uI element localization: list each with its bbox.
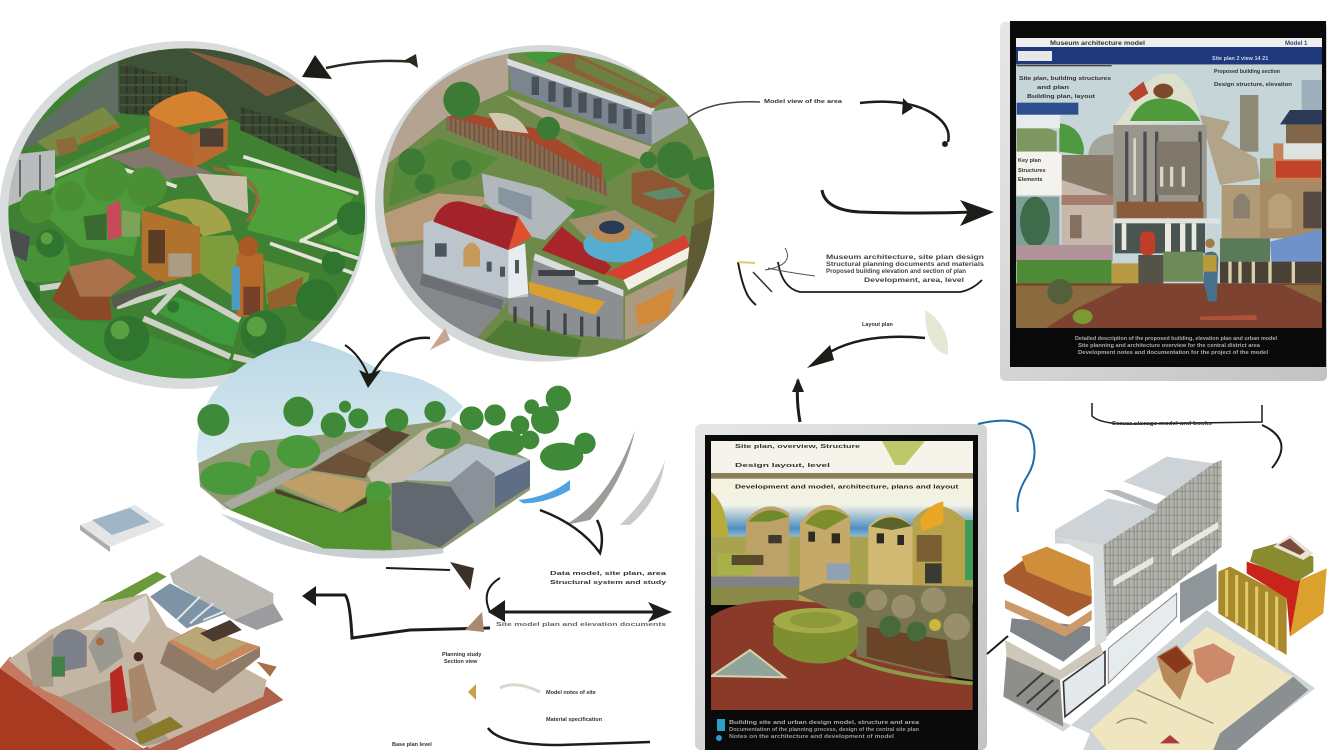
back block: [482, 173, 575, 240]
trees and hedge: [398, 82, 722, 193]
arrow: double-headed long arrow: Site model plan and elevation documents: [496, 622, 666, 628]
central tree: [20, 158, 167, 223]
server faces: [1100, 460, 1222, 643]
grey stack: [170, 555, 273, 620]
screen annotations: Elements: [1018, 177, 1042, 183]
arrow: blue cable: [978, 421, 1035, 512]
figures: [110, 665, 128, 713]
red ground: [711, 600, 973, 710]
callout: lower labels: Material specification: [546, 717, 603, 723]
arrow: second circle to label: Model view of the area: [764, 99, 843, 105]
screen header: Site plan, overview, Structure: [735, 444, 860, 450]
book pile: [1003, 547, 1103, 680]
callout: middle text with bracket: Development, area, level: [864, 277, 964, 284]
grass strip: [98, 572, 167, 603]
grey yard: [23, 62, 120, 148]
fences and shrubs: [1016, 245, 1113, 262]
screen footer text: Building site and urban design model, structure and area: [729, 720, 920, 726]
arrow: towards top-right screen: [822, 190, 994, 226]
pond: [712, 650, 785, 677]
pavilion: [148, 91, 228, 168]
callout: lower labels: [392, 652, 650, 748]
screen scene: [1016, 64, 1323, 330]
callout: bottom centre text: Structural system and study: [550, 580, 667, 586]
white cabinets: [1063, 652, 1105, 717]
arrow: circle to landscape: [345, 328, 450, 388]
floor: [1003, 610, 1315, 750]
illustration: books and server stack: [1003, 457, 1327, 750]
callout: top bracket right: Server storage model and books: [1112, 421, 1212, 427]
gold plaque: [135, 717, 183, 745]
screen annotations: Key plan: [1018, 158, 1042, 164]
callout: top bracket right: [1092, 403, 1281, 468]
screen scene: [711, 478, 974, 710]
pool: [583, 221, 653, 262]
grey shed: [8, 150, 55, 206]
grey sign: [10, 228, 30, 262]
arrow: bottom-left connector: [302, 586, 490, 638]
screen annotations: Detailed description of the proposed building, elevation plan and urban model: [1075, 336, 1277, 342]
cover: [0, 668, 117, 750]
arches: [80, 595, 150, 643]
red and gold box: [1247, 562, 1302, 637]
back wings: [1200, 115, 1260, 185]
gold books: [1218, 567, 1287, 655]
lawn: [230, 488, 392, 550]
ground: [198, 420, 530, 551]
bottom hedge: [485, 320, 582, 357]
screen annotations: Site planning and architecture overview for the central district area: [1078, 343, 1261, 349]
panel: top-right screen: [1000, 21, 1327, 381]
figures: [1140, 232, 1155, 255]
screen annotations: [1018, 69, 1293, 356]
pavilion forecourt: [108, 147, 213, 180]
stack base: [1003, 653, 1063, 727]
screen header: Design layout, level: [735, 463, 831, 469]
callout: middle text with bracket: [738, 248, 984, 305]
screen header: Model 1: [1285, 41, 1308, 47]
gravel: [367, 420, 453, 485]
arrow: leaf pointing left: Layout plan: [862, 322, 894, 328]
dome: [1115, 73, 1200, 125]
screen scene: Development and model, architecture, plans and layout: [735, 484, 959, 490]
main building: [1113, 125, 1220, 253]
panel: centre-bottom screen: [695, 424, 987, 750]
screen annotations: Building plan, layout: [1027, 94, 1095, 100]
callout: middle text with bracket: Structural planning documents and materials: [826, 261, 984, 268]
central hut: [142, 199, 240, 297]
garden bed and tower: [232, 237, 310, 317]
pages: [8, 593, 267, 748]
small right garden: [632, 170, 692, 223]
screen footer text: Documentation of the planning process, design of the central site plan: [729, 727, 920, 733]
panel: garden circle: [0, 40, 375, 390]
screen header: [711, 441, 973, 478]
plaza: [385, 193, 492, 243]
icon: small documents: [80, 505, 165, 552]
red band wing: [605, 235, 690, 280]
tan ground: [386, 54, 508, 171]
server tops: [1055, 498, 1158, 545]
arrow: curved to screen: [860, 98, 949, 147]
lawns: [388, 138, 498, 207]
screen annotations: and plan: [1037, 85, 1070, 91]
callout: lower labels: Base plan level: [392, 742, 432, 748]
callout: lower labels: Section view: [444, 659, 478, 665]
upper-left planter: [37, 107, 118, 157]
red-roof hall: [420, 201, 532, 310]
terrace bed: [447, 113, 608, 197]
callout: bottom centre text: Data model, site plan, area: [550, 571, 668, 577]
trees: [7, 202, 370, 361]
screen annotations: Proposed building section: [1214, 69, 1281, 75]
screen header: Site plan 2 view 14 21: [1212, 56, 1268, 62]
arrow: leaf pointing left: [807, 310, 948, 368]
layered block: [160, 642, 260, 693]
arrow: double-headed long arrow: [386, 562, 672, 628]
panel: campus circle: [375, 40, 722, 365]
map: [1090, 627, 1293, 750]
screen header: [1016, 38, 1322, 64]
illustration: open book model: [0, 555, 283, 750]
callout: middle text with bracket: Museum architecture, site plan design: [826, 254, 984, 261]
right buildings: [1220, 110, 1322, 265]
icon: blue swoosh: [518, 480, 570, 503]
arrow: short stem above screen: [792, 378, 804, 422]
callout: lower labels: Model notes of site: [546, 690, 596, 696]
road: [223, 430, 372, 510]
arrow: top left: [302, 54, 418, 79]
hedges: [200, 435, 391, 502]
arrow: landscape swoosh: [540, 430, 665, 553]
screen annotations: Structures: [1018, 168, 1046, 174]
screen annotations: Site plan, building structures: [1019, 76, 1111, 82]
second red roof: [542, 227, 612, 275]
crowd: [797, 583, 973, 680]
hedge wall: [118, 47, 367, 180]
timber pavilion: [275, 427, 410, 513]
grey building: [392, 443, 530, 547]
paths: [55, 137, 358, 273]
panel: landscape ellipse: [197, 340, 596, 559]
screen footer text: Notes on the architecture and development of model: [729, 734, 895, 740]
grey pavement: [395, 243, 508, 340]
long building: [508, 253, 623, 340]
callout: middle text with bracket: Proposed building elevation and section of plan: [826, 268, 966, 275]
green drum: [773, 608, 858, 663]
trees: [197, 386, 596, 471]
arrow: second circle to label: [688, 99, 843, 118]
screen header: Museum architecture model: [1050, 41, 1145, 47]
lower-left hut: [52, 258, 167, 320]
model hut: [1157, 643, 1235, 700]
ground: [1016, 283, 1323, 330]
top building: [507, 52, 688, 145]
lawn near planter: [55, 127, 150, 177]
tower: [1240, 95, 1258, 152]
callout: bottom centre text: [550, 571, 668, 586]
callout: lower labels: Planning study: [442, 652, 482, 658]
screen footer text: [716, 719, 920, 741]
left buildings: [1016, 65, 1113, 250]
screen annotations: Design structure, elevation: [1214, 82, 1293, 88]
main lawns: [227, 165, 353, 243]
towers: [717, 502, 974, 593]
arrow: black wire: [987, 636, 1008, 654]
screen annotations: Development notes and documentation for the project of the model: [1078, 350, 1268, 356]
